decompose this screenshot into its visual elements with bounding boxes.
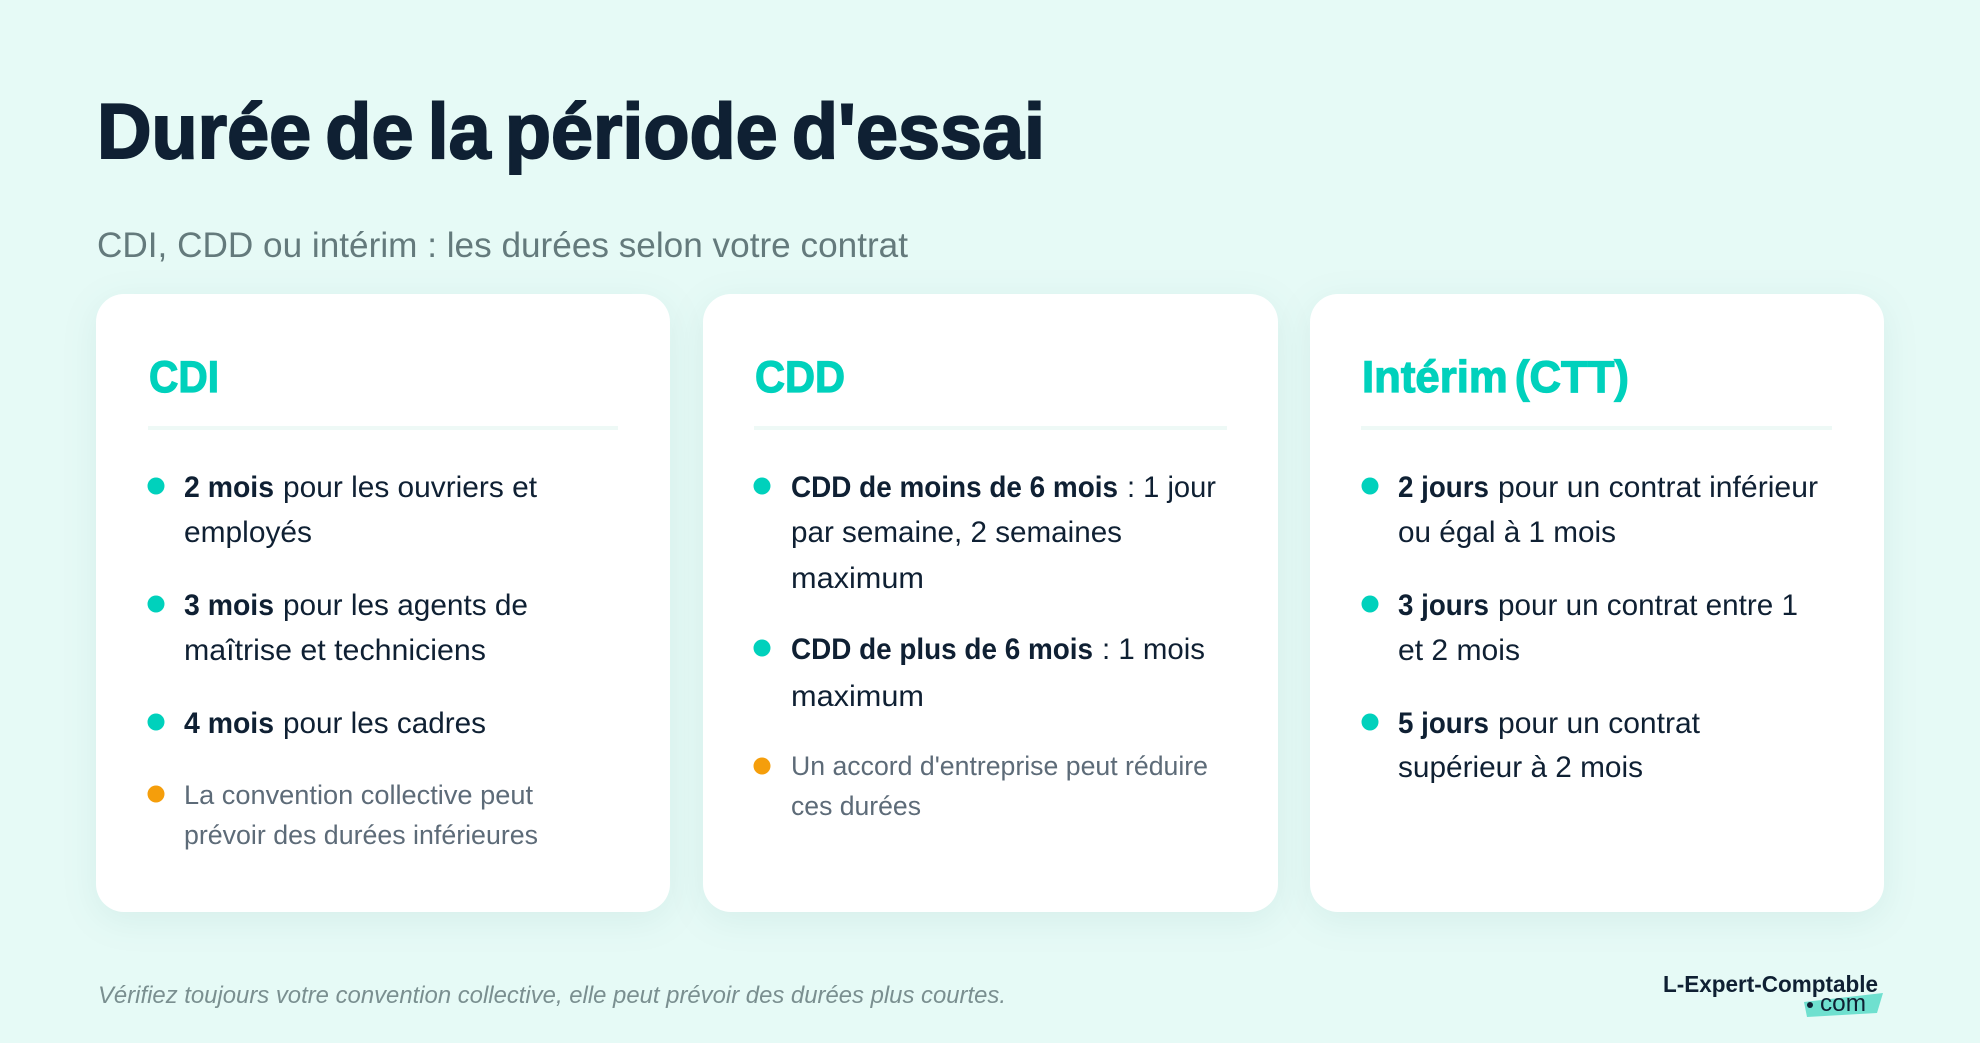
item: 5 jours: 5 jours bbox=[1398, 707, 1489, 740]
panel: Intérim bbox=[1310, 294, 1884, 912]
logo bbox=[1663, 971, 1883, 1017]
item: 3 mois bbox=[148, 589, 528, 667]
item: CDD de plus de 6 mois: maximum bbox=[791, 680, 924, 713]
item: 2 jours: 2 jours bbox=[1398, 471, 1489, 504]
item: 4 mois bbox=[148, 707, 486, 740]
subtitle: CDI, CDD ou intérim : les durées selon votre contrat bbox=[97, 225, 908, 265]
logo: com bbox=[1820, 990, 1866, 1017]
heading: CDD: CDD bbox=[755, 353, 845, 402]
item: 5 jours: pour un contrat bbox=[1498, 707, 1700, 740]
item: 2 jours: pour un contrat inférieur bbox=[1498, 471, 1818, 504]
item: 2 mois: employés bbox=[184, 516, 312, 549]
item: CDD de moins de 6 mois: CDD de moins de 6 mois bbox=[791, 471, 1118, 504]
item: CDD de moins de 6 mois: par semaine, 2 semaines bbox=[791, 516, 1122, 549]
item: 5 jours: supérieur à 2 mois bbox=[1398, 751, 1643, 784]
note: accord d'entreprise: Un accord d'entreprise peut réduire bbox=[791, 751, 1208, 781]
item: 2 mois: pour les ouvriers et bbox=[283, 471, 537, 504]
item: 3 mois: pour les agents de bbox=[283, 589, 528, 622]
item: 2 mois: 2 mois bbox=[184, 471, 274, 504]
item: 3 jours: pour un contrat entre 1 bbox=[1498, 589, 1798, 622]
item: 3 jours bbox=[1362, 589, 1798, 667]
item: 3 mois: maîtrise et techniciens bbox=[184, 634, 486, 667]
item: CDD de moins de 6 mois: : 1 jour bbox=[1127, 471, 1216, 504]
item: CDD de moins de 6 mois bbox=[754, 471, 1216, 595]
note: accord d'entreprise: ces durées bbox=[791, 791, 921, 821]
item: 4 mois: pour les cadres bbox=[283, 707, 486, 740]
item: 2 jours: ou égal à 1 mois bbox=[1398, 516, 1616, 549]
item: CDD de moins de 6 mois: maximum bbox=[791, 562, 924, 595]
item: CDD de plus de 6 mois: CDD de plus de 6 mois bbox=[791, 633, 1093, 666]
note: convention collective: prévoir des durées inférieures bbox=[184, 820, 538, 850]
item: 4 mois: 4 mois bbox=[184, 707, 274, 740]
footer note: Vérifiez toujours votre convention collective, elle peut prévoir des durées plus courtes. bbox=[98, 982, 1006, 1009]
panel: CDI bbox=[96, 294, 670, 912]
title: Durée de la période d'essai bbox=[97, 87, 1045, 175]
item: 3 mois: 3 mois bbox=[184, 589, 274, 622]
note: convention collective: La convention collective peut bbox=[184, 780, 533, 810]
heading: Intérim (CTT): Intérim (CTT) bbox=[1362, 353, 1629, 402]
item: 3 jours: 3 jours bbox=[1398, 589, 1489, 622]
heading: CDI: CDI bbox=[149, 353, 219, 402]
note: convention collective bbox=[148, 780, 538, 850]
item: 2 mois bbox=[148, 471, 537, 549]
logo: L-Expert-Comptable bbox=[1663, 971, 1878, 997]
panel: CDD bbox=[703, 294, 1278, 912]
item: CDD de plus de 6 mois: : 1 mois bbox=[1102, 633, 1205, 666]
item: 5 jours bbox=[1362, 707, 1700, 784]
item: 2 jours bbox=[1362, 471, 1818, 549]
note: accord d'entreprise bbox=[754, 751, 1208, 821]
item: 3 jours: et 2 mois bbox=[1398, 634, 1520, 667]
item: CDD de plus de 6 mois bbox=[754, 633, 1205, 713]
